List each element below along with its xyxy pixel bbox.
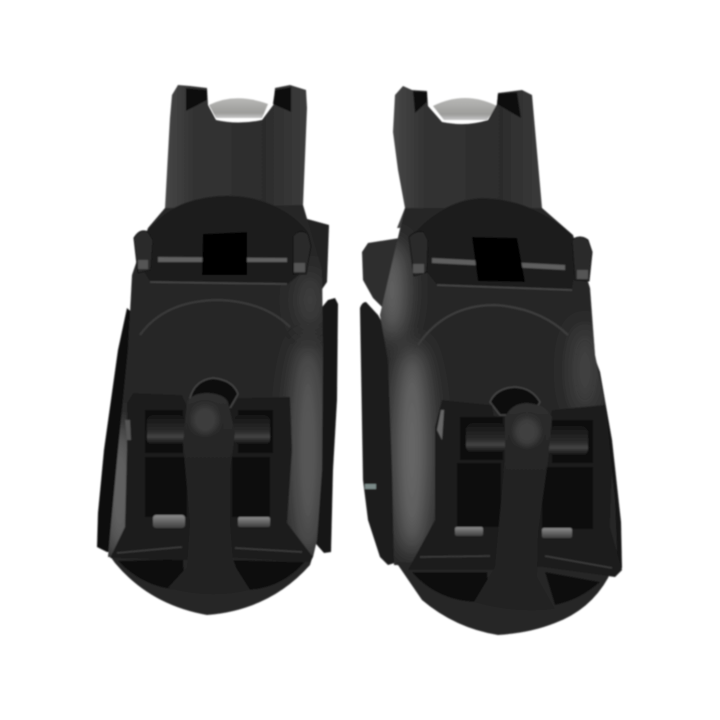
stem notches: left adapter <box>186 87 291 112</box>
lower plate line: left adapter <box>150 282 287 284</box>
stem: right adapter <box>393 86 548 228</box>
adapter: left <box>97 85 338 615</box>
metal pin: left adapter <box>209 98 268 118</box>
arch: left adapter <box>140 300 290 335</box>
side clip: left adapter, left strip <box>97 308 140 552</box>
dome base: left adapter <box>110 555 313 615</box>
lower plate line: right adapter <box>437 285 572 290</box>
side clip: right adapter, right strip <box>590 350 622 575</box>
main body: left adapter <box>108 205 323 557</box>
shading: left adapter <box>104 270 325 560</box>
dome base: right adapter <box>396 562 612 635</box>
dome recess: right adapter <box>412 572 600 605</box>
rear tab: left adapter <box>300 217 329 295</box>
shading: right adapter <box>378 240 597 555</box>
product photo: pair of black adapters <box>96 84 624 636</box>
stem notches: right adapter <box>413 91 521 118</box>
arch: right adapter <box>418 305 568 345</box>
adapter: right <box>360 86 622 635</box>
slot and tabs: left adapter <box>134 231 311 275</box>
main body: right adapter <box>380 208 618 573</box>
metal strip detail: right adapter <box>365 484 376 489</box>
stem: left adapter <box>165 85 307 225</box>
dome recess: left adapter <box>118 559 305 590</box>
slot and tabs: right adapter <box>409 232 592 282</box>
hinge assembly: right adapter <box>408 387 622 610</box>
hinge assembly: left adapter <box>110 378 313 595</box>
rear tab: right adapter <box>362 238 405 310</box>
cover plate: right adapter <box>415 198 575 290</box>
side clip: right adapter, left strip <box>360 302 404 565</box>
cover plate: left adapter <box>138 196 308 285</box>
side clip: left adapter, right strip <box>310 298 338 553</box>
metal pin: right adapter <box>433 98 497 120</box>
